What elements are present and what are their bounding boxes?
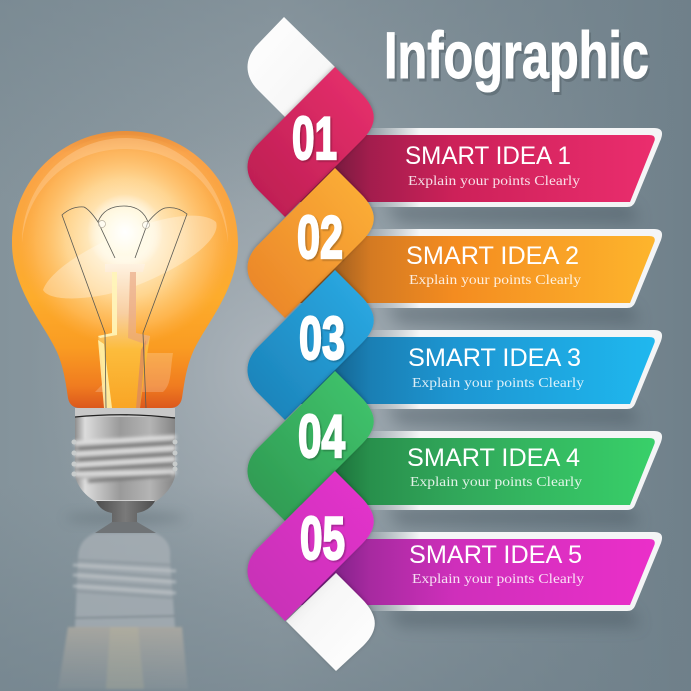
idea 3 text: Explain your points Clearly xyxy=(412,376,584,391)
panel: idea 3 bar xyxy=(300,330,662,409)
ribbon end: white bottom xyxy=(286,573,375,671)
filament core xyxy=(87,194,163,270)
ribbon 04 xyxy=(248,371,374,521)
ribbon 01 xyxy=(248,67,374,217)
idea 2 text: Explain your points Clearly xyxy=(409,273,581,288)
bulb reflection xyxy=(58,533,188,689)
elliptical highlight xyxy=(43,216,217,298)
ribbon 03 xyxy=(248,270,374,420)
ribbon 02 xyxy=(248,168,374,318)
glass reflection band xyxy=(22,138,228,243)
light bulb xyxy=(12,131,238,522)
lower highlight xyxy=(95,353,173,392)
panel: idea 5 bar xyxy=(300,532,662,611)
idea 2 heading: SMART IDEA 2 xyxy=(406,242,579,270)
glass body xyxy=(12,131,238,408)
inner glow xyxy=(16,135,234,350)
panel: idea 1 bar xyxy=(300,128,662,207)
bar shadows xyxy=(385,205,640,626)
idea 4 text: Explain your points Clearly xyxy=(410,475,582,490)
idea 4 heading: SMART IDEA 4 xyxy=(407,444,580,472)
number 01: 01 xyxy=(292,105,337,172)
reflected contact cone xyxy=(95,522,156,533)
glass stem xyxy=(98,264,150,408)
idea 1 text: Explain your points Clearly xyxy=(408,174,580,189)
idea 3 heading: SMART IDEA 3 xyxy=(408,344,581,372)
ribbon start: white top xyxy=(248,17,335,117)
idea 5 text: Explain your points Clearly xyxy=(412,572,584,587)
idea 5 heading: SMART IDEA 5 xyxy=(409,541,582,569)
number 02: 02 xyxy=(297,204,343,271)
ribbon 05 xyxy=(248,471,374,621)
filament wire xyxy=(62,206,187,408)
screw base xyxy=(72,408,178,522)
number 03: 03 xyxy=(299,305,345,372)
idea 1 heading: SMART IDEA 1 xyxy=(405,142,571,170)
number 04: 04 xyxy=(298,403,345,470)
number 05: 05 xyxy=(300,505,345,572)
shadow under lamp xyxy=(65,513,185,523)
panel: idea 2 bar xyxy=(300,229,662,308)
panel: idea 4 bar xyxy=(300,431,662,510)
